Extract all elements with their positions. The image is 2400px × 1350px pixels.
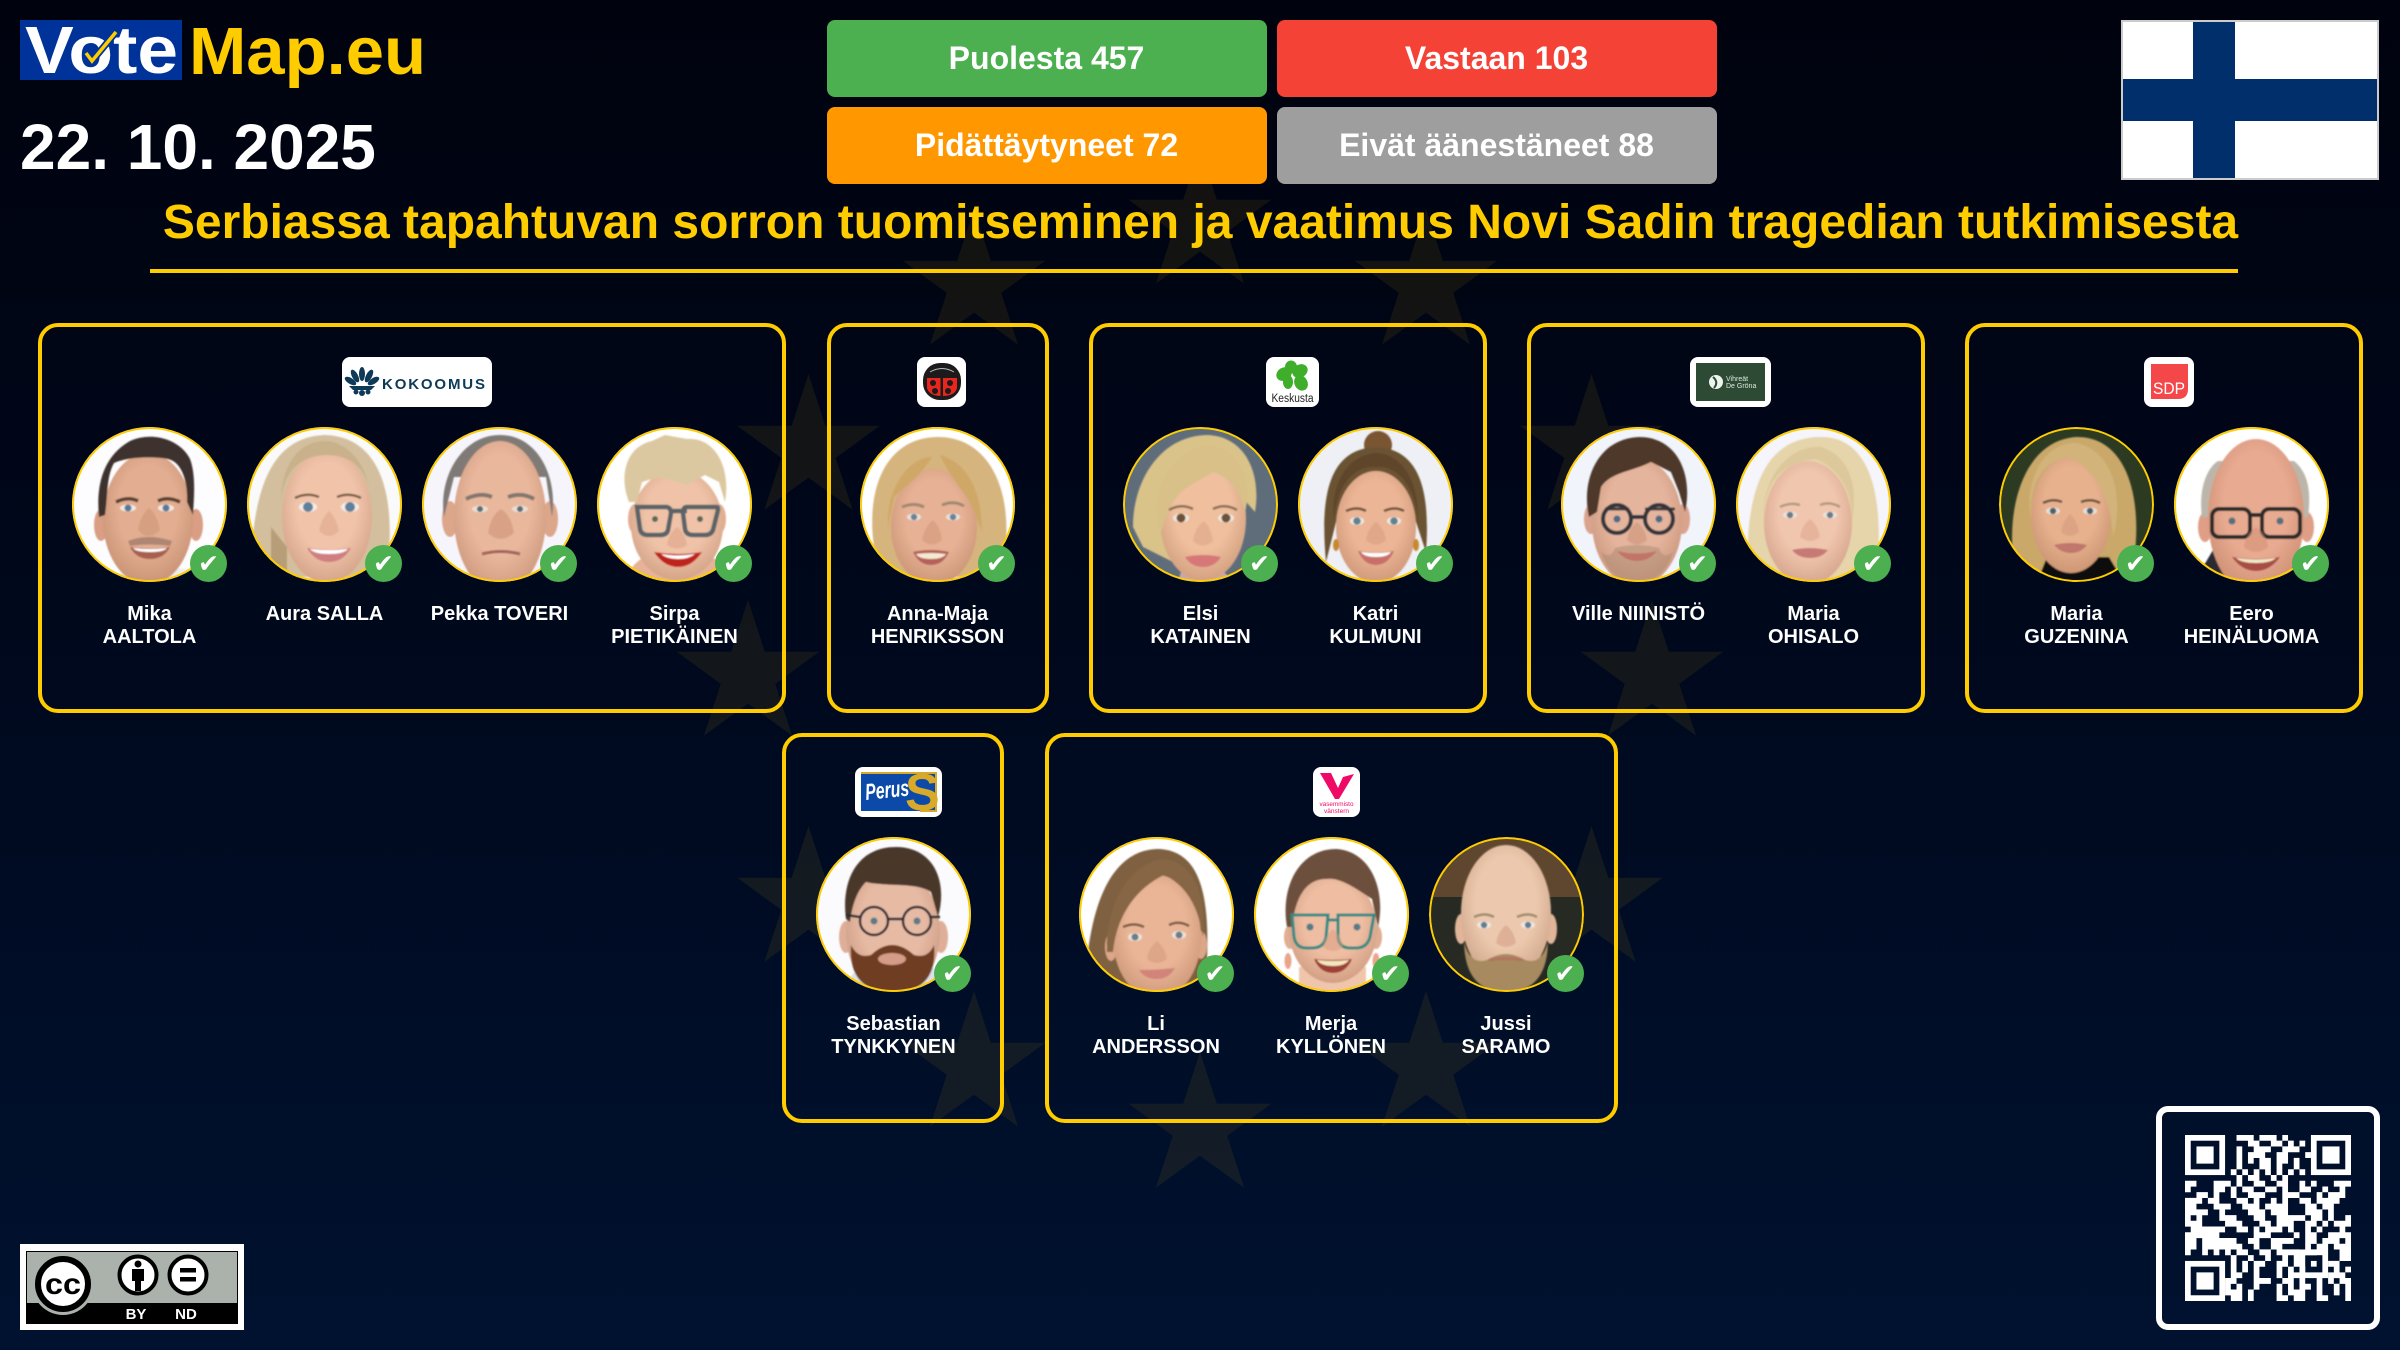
party logo: Vasemmisto: vänstern [1324, 808, 1349, 815]
vote badge [190, 545, 227, 582]
name: Li [1147, 1012, 1165, 1034]
vote badge [1679, 545, 1716, 582]
person: Sirpa Pietikainen [597, 427, 752, 648]
vote badge: ✔ [942, 959, 963, 988]
name [1329, 602, 1422, 648]
party logo: SDP [2144, 357, 2194, 407]
vote badge: ✔ [1380, 959, 1400, 988]
portrait [1999, 427, 2154, 582]
person: Li Andersson [1079, 837, 1234, 1058]
vote badge [715, 545, 752, 582]
panel: SDP [1965, 323, 2363, 713]
name [1418, 1012, 1594, 1058]
vote badge [934, 955, 971, 992]
party logo: Vasemmisto: vasemmisto [1320, 801, 1354, 808]
party logo: Vihreät: De Gröna [1726, 383, 1756, 390]
panel: Perussuomalaiset [782, 733, 1004, 1123]
name [1150, 602, 1251, 648]
vote count: for: Puolesta 457 [949, 40, 1144, 76]
vote count: did not vote [1276, 107, 1716, 184]
title: Serbiassa tapahtuvan sorron tuomitseminen ja vaatimus Novi Sadin tragedian tutkimisesta [163, 196, 2238, 249]
person: Eero Heinäluoma [2174, 427, 2329, 648]
name: KULMUNI [1329, 626, 1422, 648]
name: Mika [127, 602, 172, 624]
portrait [72, 427, 227, 582]
portrait [247, 427, 402, 582]
licence badge: CC BY-ND: ND [175, 1306, 197, 1323]
vote badge [1854, 545, 1891, 582]
name: Merja [1305, 1012, 1357, 1034]
vote badge: ✔ [1862, 549, 1883, 578]
vote badge: ✔ [2300, 549, 2321, 578]
portrait [1298, 427, 1453, 582]
portrait [1561, 427, 1716, 582]
name: TYNKKYNEN [831, 1036, 956, 1058]
party logo: SDP: SDP [2152, 379, 2184, 398]
logo: VoteMap.eu [20, 20, 426, 89]
vote badge: ✔ [986, 549, 1007, 578]
vote badge [1416, 545, 1453, 582]
portrait [860, 427, 1015, 582]
name [871, 602, 1004, 648]
vote badge [2117, 545, 2154, 582]
licence badge: CC BY-ND: cc [45, 1268, 81, 1301]
vote badge: ✔ [1249, 549, 1270, 578]
person: Merja Kyllönen [1254, 837, 1409, 1058]
name [611, 602, 738, 648]
person: Anna-Maja Henriksson [860, 427, 1015, 648]
name: SARAMO [1462, 1036, 1550, 1058]
panel: Keskusta [1089, 323, 1487, 713]
portrait [422, 427, 577, 582]
name [1092, 1012, 1220, 1058]
person: Mika Aaltola [72, 427, 227, 648]
name: Elsi [1183, 602, 1218, 624]
portrait [1428, 837, 1584, 992]
name: GUZENINA [2024, 626, 2129, 648]
person: Ville Niinistö [1561, 427, 1716, 624]
vote badge [1372, 955, 1408, 992]
vote badge: ✔ [2125, 549, 2146, 578]
name: Anna-Maja [887, 602, 988, 624]
party logo: Kokoomus: KOKOOMUS [382, 376, 487, 393]
person: Pekka Toveri [422, 427, 577, 624]
panel: Vihreät [1527, 323, 1925, 713]
portrait [816, 837, 971, 992]
party logo: Kokoomus [342, 357, 492, 407]
vote badge: ✔ [1424, 549, 1445, 578]
name: AALTOLA [103, 626, 196, 648]
vote badge [1241, 545, 1278, 582]
name: PIETIKÄINEN [611, 626, 738, 648]
party logo: Vihreät: Vihreät [1726, 376, 1748, 383]
name [2184, 602, 2319, 648]
portrait [1079, 837, 1234, 992]
vote count: for [826, 20, 1266, 97]
name: Ville NIINISTÖ [1572, 602, 1705, 624]
vote badge: ✔ [723, 549, 744, 578]
party logo: Perussuomalaiset [855, 767, 942, 817]
name: HEINÄLUOMA [2184, 626, 2319, 648]
vote badge: ✔ [1555, 959, 1575, 988]
name [103, 602, 196, 648]
person: Katri Kulmuni [1298, 427, 1453, 648]
name: Pekka TOVERI [431, 602, 568, 624]
panel: Kokoomus [38, 323, 786, 713]
party logo: Perussuomalaiset: Perus [864, 775, 910, 805]
vote badge [1196, 955, 1234, 992]
name: Maria [2050, 602, 2103, 624]
person: Sebastian Tynkkynen [816, 837, 971, 1058]
vote badge: ✔ [373, 549, 394, 578]
name: Sebastian [846, 1012, 941, 1034]
name [1768, 602, 1859, 648]
name: Katri [1353, 602, 1398, 624]
person: Elsi Katainen [1123, 427, 1278, 648]
vote count: abstained [826, 107, 1266, 184]
name: Maria [1787, 602, 1840, 624]
panel: Vasemmisto [1044, 733, 1618, 1123]
person: Aura Salla [247, 427, 402, 624]
vote badge: ✔ [1205, 959, 1225, 988]
name [2024, 602, 2129, 648]
vote badge [1546, 955, 1584, 992]
name [1244, 1012, 1418, 1058]
party logo: Vihreät [1690, 357, 1771, 407]
vote badge [365, 545, 402, 582]
party logo: Keskusta: Keskusta [1272, 393, 1314, 405]
person: Jussi Saramo [1418, 837, 1594, 1058]
name: OHISALO [1768, 626, 1859, 648]
QR code [2156, 1106, 2380, 1330]
name: Jussi [1480, 1012, 1532, 1034]
vote badge [540, 545, 577, 582]
portrait [2174, 427, 2329, 582]
vote count: did not vote: Eivät äänestäneet 88 [1339, 127, 1654, 163]
vote count: abstained: Pidättäytyneet 72 [915, 127, 1178, 163]
portrait [1254, 837, 1409, 992]
vote badge [978, 545, 1015, 582]
portrait [1123, 427, 1278, 582]
party logo: ladybird [917, 357, 966, 407]
vote count: against [1276, 20, 1716, 97]
name: ANDERSSON [1092, 1036, 1220, 1058]
licence badge: CC BY-ND [20, 1244, 244, 1330]
panel: Kristillisdemokraatit [826, 323, 1048, 713]
name: Sirpa [649, 602, 700, 624]
party logo: Vasemmisto [1313, 767, 1360, 817]
party logo: Keskusta [1266, 357, 1319, 407]
name: Aura SALLA [266, 602, 383, 624]
name: KATAINEN [1150, 626, 1251, 648]
vote badge: ✔ [198, 549, 219, 578]
vote badge: ✔ [548, 549, 569, 578]
flag: Finland [2121, 20, 2379, 180]
portrait [597, 427, 752, 582]
portrait [1736, 427, 1891, 582]
name [831, 1012, 956, 1058]
name: Eero [2229, 602, 2274, 624]
name: HENRIKSSON [871, 626, 1004, 648]
vote count: against: Vastaan 103 [1405, 40, 1588, 76]
person: Maria Guzenina [1999, 427, 2154, 648]
licence badge: CC BY-ND: BY [126, 1306, 146, 1323]
vote badge [2292, 545, 2329, 582]
name: KYLLÖNEN [1276, 1036, 1386, 1058]
date: 22. 10. 2025 [20, 111, 376, 183]
vote badge: ✔ [1687, 549, 1708, 578]
person: Maria Ohisalo [1736, 427, 1891, 648]
